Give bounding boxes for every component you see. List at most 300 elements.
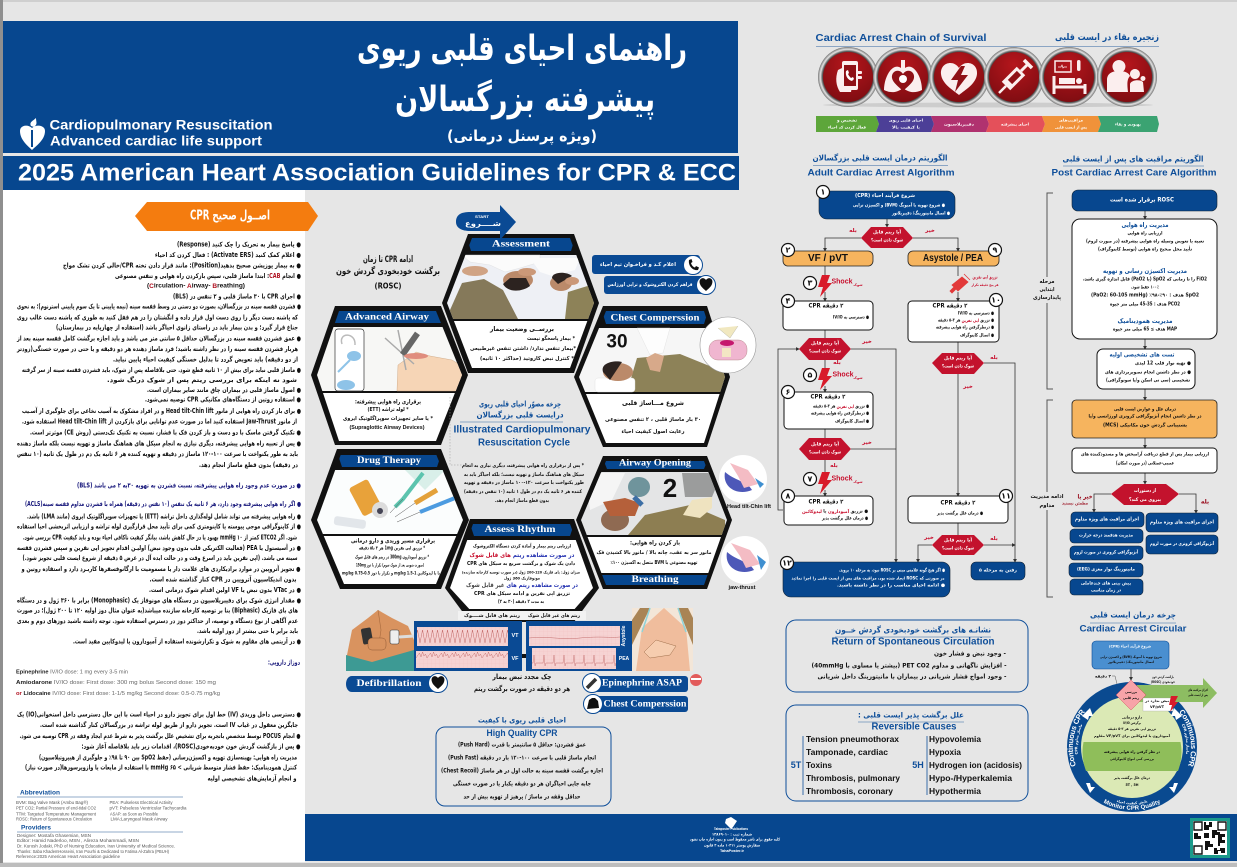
connectors: post arrest (1094, 211, 1196, 513)
panel: reversible causes: Reversible Causes (872, 722, 957, 732)
decision: shockable rhythm 3: آیا ریتم قابل (944, 354, 972, 362)
box: airway oxygen haemodynamics (1072, 219, 1217, 339)
decision: shockable rhythm 5: آیا ریتم قابل (944, 536, 972, 544)
icon: bed and monitor (1054, 60, 1085, 94)
heading: cardiac arrest circular: چرخه درمان ایست قلبی (1090, 610, 1176, 620)
icon: family (1107, 60, 1145, 92)
box 11: 2 minute CPR: ۱۱ (1001, 492, 1011, 500)
heading: post cardiac arrest algorithm: Post Cardiac Arrest Care Algorithm (1052, 168, 1216, 178)
callout: shock: نبض ندارد در (1144, 699, 1169, 703)
box: airway oxygen haemodynamics: مدیریت راه هوایی (1122, 221, 1168, 229)
chevrons: chain labels: بهبودی و بقاء (1115, 122, 1142, 126)
list: 5T: 5T (791, 760, 802, 770)
bracket label: ongoing management (1030, 492, 1064, 510)
rhythm text: مونوفازیک 360 ژول (504, 576, 541, 580)
abbreviation: ROSC: Return of Spontaneous Circulation (16, 816, 93, 822)
connector (522, 654, 526, 658)
panel: return of spontaneous circulation: - وجود نبض و فشار خون (934, 650, 1006, 658)
abbreviation: TTM: Targeted Temperature Management (16, 812, 97, 816)
list: 5H: 5H (912, 760, 924, 770)
text block: CPR principles: ● انجام CAB: ابتدا ماساژ قلبی، سپس بازکردن راه هوایی و تنفس مصنوعی (115, 272, 301, 280)
text block: advanced airway and shock: ● در VTac بدون نبض یا VF اولین اقدام شوک درمانی است. (149, 586, 301, 594)
boxes: no pathway: مدیریت هدفمند درجه حرارت (1079, 534, 1133, 538)
subtitle english: Cardiopulmonary Resuscitation (50, 118, 272, 132)
box 12: ROSC outcome: ● اگر هیچ گونه علامتی مبنی بر ROSC نبود، به مرحله ۱۰ بروید. (839, 566, 945, 574)
text block: advanced airway and shock: های بای فازیک (Biphasic) بنا بر توصیه کارخانه سازنده میباشد(به عنوان مثال دوز اولیه ۱۲۰ تا ۲۰۰ ژول)؛ در صورت (17, 607, 298, 615)
box 6: 2 minute CPR: ۲ دقیقه CPR (810, 394, 846, 400)
text block: CPR principles: از دو دقیقه) باید تعویض گردد تا بدلیل خستگی کیفیت احیاء پایین نیاید. (113, 356, 298, 364)
icon: syringe epinephrine: هر پنج دقیقه تکرار (971, 283, 999, 287)
box 10: 2 minute CPR: ● تزریق اپی نفرین هر ۳-۵ دقیقه (938, 318, 994, 324)
labels: no or unsure, yes: مطمئن نیستید (1062, 500, 1088, 506)
label: defibrillation: Defibrillation (356, 679, 422, 689)
decision: follows commands: از دستورات (1134, 488, 1156, 494)
label: chest compression (584, 694, 688, 714)
panel: return of spontaneous circulation: - افزایش ناگهانی و مداوم PET CO2 (بیشتر یا مساوی با 40mmHg) (812, 662, 1007, 670)
abbreviation: PET CO2: Partial Pressure of end-tidal CO2 (16, 806, 97, 810)
box 1: start CPR (816, 186, 955, 219)
ring (1067, 682, 1197, 812)
labels: yes and no 5: خیر (923, 535, 934, 541)
box 10: 2 minute CPR: ● درنظرگرفتن راه هوایی پیشرفته (936, 324, 994, 330)
label: head tilt chin lift: Head tilt-Chin lift (727, 504, 771, 510)
box: airway oxygen haemodynamics: تعبیه یا تعویض وسیله راه هوایی پیشرفته (در صورت لزوم) (1086, 238, 1204, 244)
text block: advanced airway and shock: بدون اندیکاسیون آتروپین در CPR کنار گذاشته شده است. (149, 574, 296, 583)
abbreviation: pVT: Pulseless Ventricular Tachycardia (110, 806, 187, 810)
labels: yes and no 3: خیر (962, 384, 973, 390)
label: defibrillation (346, 674, 448, 692)
icon: syringe epinephrine (950, 274, 999, 293)
advanced airway note: * پس از برقراری راه هوایی پیشرفته، دیگری نیازی به انجام (462, 462, 584, 469)
box 12: ROSC outcome: در صورتی که ROSC ایجاد شده بود، مراقبت های پس از ایست قلبی را اجرا نمائید (792, 576, 945, 580)
box: start CPR: شروع فرآیند احیاء (CPR) (1109, 644, 1151, 648)
panel: high quality CPR: انجام ماساژ قلبی با سرعت ۱۰۰-۱۲۰ بار در دقیقه (Push Fast) (448, 754, 596, 762)
heading: continue CPR until ROSC: ادامه CPR تا زمان (363, 255, 413, 265)
text block: access and ROSC: جایگزین معقول در غیاب IV است. تجویز دارو از طریق لوله تراشه در بزرگسالان کنار گذاشته شده است. (40, 721, 298, 729)
box 4: 2 minute CPR: ۴ (786, 296, 791, 306)
compression text (605, 399, 701, 435)
box: initial diagnostic tests: تست های تشخیصی اولیه (1110, 352, 1174, 358)
subtitle english (50, 118, 272, 148)
inner text: دارو درمانی (1122, 714, 1142, 720)
box 6: 2 minute CPR: ۶ (786, 388, 791, 396)
box 11: 2 minute CPR: ● درمان علل برگشت پذیر (936, 510, 983, 516)
label: epinephrine ASAP (582, 674, 688, 692)
text block: CPR principles (16, 240, 301, 469)
decision: shockable rhythm 4 (799, 438, 851, 460)
hexagon: assess rhythm (445, 519, 600, 622)
chevrons: chain labels: تشخیص و (836, 118, 858, 122)
panel: principles of CPR (3, 190, 318, 862)
icon: shock 7 (804, 472, 863, 494)
panel: return of spontaneous circulation: - وجود امواج فشار شریانی در بیماران با مانیتورینگ داخل شریانی (818, 672, 1007, 680)
providers (16, 824, 183, 859)
box: airway oxygen haemodynamics: مدیریت اکسیژن رسانی و تهویه (1103, 267, 1187, 275)
chain: advanced resuscitation (984, 47, 1044, 107)
box: initial diagnostic tests: ● تهیه نوار قلب 12 لیدی (1135, 360, 1191, 366)
labels: yes and no 3 (962, 355, 998, 390)
panel: high quality CPR: عمق فشردن: حداقل ۵ سانتیمتر با قدرت (Push Hard) (458, 742, 586, 748)
panel: reversible causes: علل برگشت پذیر ایست قلبی : (858, 710, 964, 720)
icon: warning stamp (690, 674, 702, 686)
arrow: start (456, 205, 516, 240)
text block: CPR principles: باید به طور یکنواخت با سرعت ۱۰۰-۱۲۰ ماساژ در دقیقه و تهویه کننده هر ۶ ثانیه یک دم در طول یک ثانیه (۱۰ تنفس (17, 450, 298, 458)
heading: continue CPR until ROSC (336, 255, 440, 290)
box: airway oxygen haemodynamics: ۱۰۰٪ حفظ شود. (1131, 284, 1159, 290)
text block: advanced airway and shock: ● در آریتمی های مقاوم به شوک و تکرارشونده استفاده از آمیودارون یا لیدوکایین مفید است. (73, 637, 301, 646)
box: asystole PEA: Asystole / PEA (923, 253, 983, 264)
text block: CPR principles: ● اصول ماساژ قلبی در بیماران چاق مانند سایر بیماران است. (147, 386, 301, 394)
text block: advanced airway and shock: ● در آسیستول یا PEA (فعالیت الکتریکی قلب بدون وجود نبض) اولیـن اقدام تجویز اپی نفرین و سپس فشردن قفسه (17, 543, 301, 552)
labels: no or unsure, yes: خیر یا (1078, 494, 1092, 500)
band label: Drug Therapy (357, 456, 421, 466)
decision: rhythm check: ریتم قلبی (1123, 696, 1139, 700)
bracket label: ongoing management: مداوم (1040, 503, 1054, 509)
list: 5H: Hydrogen ion (acidosis) (929, 760, 1022, 770)
box 8: 2 minute CPR: ۲ دقیقه CPR (808, 498, 844, 506)
inner text: 5T , 5H (1126, 783, 1138, 787)
text block: CPR principles: ● برای باز کردن راه هوایی از مانور Head tilt-Chin lift و در افراد مشکوک به آسیب نخاعی برای جلوگیری از آسـیب (22, 406, 301, 415)
drug text: برقراری مسیر وریدی و دارو درمانی (351, 538, 435, 544)
ring arrows (1082, 708, 1182, 793)
drug text: * تزریق اپی نفرین 1mg هر ۳ تا۵ دقیقه (359, 546, 425, 552)
boxes: yes pathway: آنژیوگرافی کرونری در صورت لزوم (1150, 540, 1214, 547)
decision: follows commands: پیروی می کند؟ (1129, 497, 1161, 503)
guidelines bar: 2025 American Heart Association Guidelines for CPR & ECC (18, 160, 736, 186)
icon: shock 7: شوک (853, 480, 863, 484)
assessment text: *بیمار تنفس ندارد/ داشتن تنفس غیرطبیعی (470, 346, 576, 352)
orange heading: اصــول صحیح CPR (190, 208, 270, 224)
list: 5T: Thrombosis, pulmonary (806, 773, 900, 783)
box 10: 2 minute CPR: ● اتصال کاپنوگراف (960, 332, 994, 338)
rhythm text: در صورت مشاهده ریتم های قابل شوک (470, 552, 575, 559)
list: 5H: Hypoxia (929, 747, 961, 757)
label: jaw thrust: jaw-thrust (727, 585, 756, 591)
boxes: no pathway: اجرای مراقبت های ویژه مداوم (1075, 516, 1139, 522)
icon: shock 5: Shock (832, 372, 854, 378)
box: start CPR (1092, 641, 1169, 669)
icon: jaw thrust (721, 536, 769, 584)
labels: yes and no (849, 228, 935, 234)
chart: shockable rhythms VT VF: VF (511, 656, 519, 662)
icon: shock 5: ۵ (808, 370, 813, 380)
icon: syringe (999, 60, 1032, 93)
assessment text: * بیمار پاسخگو نیست (527, 335, 575, 342)
ring labels: ماساژ مداوم CPR (1182, 724, 1190, 754)
decision: rhythm check: بررسی (1125, 690, 1138, 694)
ring labels: Continuous CPR (1180, 710, 1196, 766)
labels: yes and no 4 (830, 440, 872, 469)
rhythm text: در صورت مشاهده ریتم های غیر قابل شوک (466, 582, 578, 589)
title: پیشرفته بزرگسالان (395, 79, 655, 120)
publisher text (690, 827, 781, 853)
providers: Editor: Hamid Naderloo, MSN , Alireza Mohammadi, MSN (17, 838, 139, 843)
heading: chain of survival: زنجیره بقاء در ایست قلبی (1055, 33, 1159, 43)
chain: defibrillation (929, 47, 989, 107)
chart: shockable rhythms VT VF (414, 621, 522, 671)
inner text (1094, 714, 1171, 787)
box: treat causes and complications: درمان علل و عوارض ایست قلبی (1114, 406, 1176, 412)
box: start CPR: اتصال مانیتورینگ/ دفیبریلاتور (1107, 659, 1154, 665)
callout: electroshock and emergency therapy: فراهم کردن الکتروشوک و تراپی اورژانس (608, 281, 692, 288)
icon: head tilt chin lift (719, 455, 767, 503)
airway opening text: مانور سر به عقب، چانه بالا / مانور بالا کشیدن فک (596, 549, 712, 556)
box: asystole PEA: ۹ (993, 246, 998, 254)
list: 5T (791, 734, 900, 796)
box 6: 2 minute CPR: ● تزریق اپی نفرین هر ۳-۵ دقیقه (813, 404, 869, 410)
title: (ویژه پرسنل درمانی) (447, 127, 597, 146)
publisher text: TahaPoster.ir (720, 849, 745, 853)
text block: access and ROSC: و انجام آزمایش‌های تشخیصی اولیه (208, 773, 296, 782)
icon: syringe epinephrine: تزریق اپی نفرین (972, 276, 998, 280)
boxes: yes pathway: اجرای مراقبت های ویژه مداوم (1150, 520, 1214, 526)
decision: shockable rhythm 5: شوک دادن است؟ (942, 544, 974, 552)
decision: shockable rhythm 2: شوک دادن است؟ (809, 348, 841, 354)
decision: rhythm check (1116, 680, 1146, 710)
heading: continue CPR until ROSC: برگشت خودبخودی گردش خون (336, 265, 440, 277)
box 1: start CPR: ۱ (821, 188, 825, 196)
box: VF pVT: ۲ (786, 246, 791, 254)
list: 5H: Hypothermia (929, 786, 981, 796)
arrow: post cardiac arrest care (1137, 675, 1217, 708)
arrow: post cardiac arrest care: بازگشت گردش خون (1152, 675, 1174, 679)
hexagon: airway opening and breathing (576, 456, 733, 589)
airway opening text: تهویه مصنوعی با BVM متصل به اکسیژن ۱۰۰٪ (610, 560, 698, 566)
callout: activate code (592, 255, 702, 274)
box 12: ROSC outcome: ۱۲ (782, 558, 792, 568)
chevrons: chain labels: پس از ایست قلبی (1055, 124, 1088, 130)
subtitle english: Advanced cardiac life support (50, 134, 263, 148)
abbreviation: PEA: Pulseless Electrical Activity (110, 800, 173, 805)
icon: publisher logo (725, 817, 737, 829)
list: 5T: Tamponade, cardiac (806, 747, 888, 757)
chevrons: chain labels: فعال کردن کد احیاء (828, 124, 867, 130)
ring labels: Monitor CPR Quality (1104, 799, 1160, 810)
box: go to step 5: رفتن به مرحله ۵ (979, 568, 1017, 574)
list: 5H (912, 734, 1022, 796)
chevrons: chain labels (816, 116, 1159, 132)
arrow: post cardiac arrest care: خودبخودی (ROSC) (1151, 680, 1175, 684)
box 6: 2 minute CPR (782, 386, 873, 429)
text block: drug dosage: Epinephrine IV/IO dose: 1 mg every 3-5 min (16, 670, 128, 676)
text block: CPR principles: ● استفاده روتین از دستگاه‌های مکانیکی CPR توصیه نمی‌شود. (145, 396, 301, 404)
box 4: 2 minute CPR (782, 294, 873, 330)
text block: compression ratio: ● در صورت عدم وجود راه هوایی پیشرفته، نسبت فشردن به تهویه ۳۰به ۲ می باشد (BLS) (77, 482, 301, 490)
callout: electroshock and emergency therapy (604, 276, 716, 294)
list: 5T: Toxins (806, 760, 832, 770)
text block: compression ratio (25, 482, 301, 508)
publisher text: Tahaposter Publications (714, 827, 748, 831)
box: neurological assessment (1072, 448, 1217, 473)
box: neurological assessment: ارزیابی بیمار پس از قطع دریافت آرامبخش ها و مسدودکننده های (1081, 450, 1209, 458)
heading: post cardiac arrest algorithm: الگوریتم مراقبت های پس از ایست قلبی (1062, 154, 1204, 164)
decision: shockable rhythm 5 (932, 535, 984, 555)
header banner (3, 21, 738, 153)
inner text: در نظر گرفتن راه هوایی پیشرفته (1104, 749, 1160, 754)
list: 5T: Thrombosis, coronary (806, 786, 893, 796)
decision: shockable rhythm 2 (799, 338, 851, 360)
text block: CPR principles: (Circulation- Airway- Breathing) (147, 282, 245, 290)
labels: yes and no: بله (849, 228, 857, 234)
decision: shockable rhythm 4: آیا ریتم قابل (811, 440, 839, 448)
text block: CPR principles: شود نه اینکه برای بررسی ریتم پس از شوک درنگ شود. (107, 375, 297, 384)
connectors: adult algorithm (778, 219, 1015, 562)
icon: chest cross-section (700, 317, 756, 373)
label: 2 minutes: ۲ دقیقه (1095, 674, 1112, 678)
text block: drug dosage: Amiodarone IV/IO dose: First dose: 300 mg bolus Second dose: 150 mg (16, 680, 216, 686)
box: treat causes and complications (1072, 400, 1217, 438)
box: initial diagnostic tests: ● در نظر داشتن انجام تصویربرداری های (1105, 370, 1191, 376)
heading: chain of survival: Cardiac Arrest Chain of Survival (816, 32, 987, 44)
box: treat causes and complications: پشتیبانی گردش خون مکانیکی (MCS) (1103, 422, 1187, 428)
text block: CPR principles: ● اجرای CPR با ۳۰ ماساژ قلبی و ۲ تنفس در (BLS) (173, 292, 301, 300)
box 6: 2 minute CPR: ● اتصال کاپنوگراف (835, 418, 869, 424)
text block: advanced airway and shock: سینه می باشد. (اپی نفرین باید در اسرع وقت و در حالت ایده آل در عرض ۵ دقیقه از شروع ایست قلبی تجویز شود.) (22, 553, 297, 562)
panel: reversible causes (786, 705, 1028, 801)
text block: access and ROSC: ● انجام POCUS توسط متخصص باتجربه برای تشخیص علل برگشت پذیر به شرط عدم ایجاد وقفه در CPR توصیه می شود. (20, 732, 301, 740)
illustration: chest compression patient (632, 608, 693, 671)
heading: post cardiac arrest algorithm (1052, 154, 1216, 178)
chart: cardiac arrest circular (1067, 640, 1217, 812)
icon: shock 3: ۳ (808, 278, 813, 288)
arrow: post cardiac arrest care: پس از ایست قلبی (1188, 693, 1208, 697)
arrow: start: START (475, 215, 490, 219)
text block: CPR principles: که پاشنه دست دیگر را روی دست اول قرار داده و انگشتان را در هم قفل کنید به طوری که پاشنه دست غالب روی (17, 313, 298, 321)
callout: shock (1143, 696, 1178, 712)
bracket: initial stabilization: مرحله (1040, 279, 1054, 285)
chain: post arrest care (1039, 47, 1099, 107)
boxes: no pathway: در زمان مناسب (1091, 588, 1122, 594)
orange heading (135, 202, 318, 231)
assessment text (470, 325, 576, 362)
text block: advanced airway and shock: ● تجویز آتروپین در موارد برادیکاردی های علامت دار یا مسمومیت با ارگانوفسفرها کاربـرد دارد و استفاده روتین و (21, 564, 301, 573)
labels: yes and no 4: خیر (861, 440, 872, 446)
assessment text: * کنترل نبض کاروتید (حداکثر ۱۰ ثانیه) (480, 355, 574, 362)
abbreviation: LMA:Laryngeal Mask Airway (110, 816, 168, 822)
icon: shock 5: شوک (853, 376, 863, 380)
callout: activate code: اعلام کـد و فراخـوان تیم احیاء (600, 261, 676, 268)
box: airway oxygen haemodynamics: PCO2 هدف : 35-45 میلی متر جیوه (1110, 302, 1180, 308)
rhythm text (462, 542, 581, 605)
decision: follows commands (1111, 484, 1179, 505)
labels: yes and no 5: بله (990, 536, 998, 542)
band label: Assessment (492, 240, 551, 250)
box: neurological assessment: عصبی-عضلانی (در صورت امکان) (1116, 460, 1174, 466)
providers: Dr. Kurosh Jodaki, PhD of Nursing Education, Iran University of Medical Science. (17, 844, 175, 848)
decision: shockable rhythm 3: شوک دادن است؟ (942, 362, 974, 370)
chart: shockable rhythms VT VF: VT (511, 633, 519, 639)
advanced airway note: کننده هر ۶ ثانیه یک دم در طول ۱ ثانیه (۱۰ تنفس در دقیقه) (464, 489, 582, 495)
text block: CPR principles: ● اعلام کمک کنید (Activate ERS) : فعال کردن کد احیاء (155, 251, 301, 259)
box 11: 2 minute CPR (908, 490, 1012, 523)
inner text: درمان علل برگشت پذیر (1113, 775, 1150, 780)
abbreviation: Abbreviation (20, 790, 60, 796)
box 10: 2 minute CPR (908, 294, 1002, 342)
title (357, 29, 687, 146)
text block: drug dosage: دوزاژ دارویی: (268, 659, 300, 667)
rhythm text: تزریق اپی نفرین و ادامه سیکل های CPR (474, 591, 570, 597)
box 12: ROSC outcome (780, 556, 950, 597)
heading: cardiac arrest circular: Cardiac Arrest Circular (1080, 624, 1187, 634)
labels: yes and no 3: بله (990, 355, 998, 361)
heading: adult cardiac arrest algorithm (808, 152, 954, 178)
center title: Illustrated Cardiopulmonary (454, 424, 591, 436)
box 12: ROSC outcome: ● ادامه احیای مناسب را در نظر داشته باشید. (837, 584, 945, 588)
box 8: 2 minute CPR: ● درمان علل برگشت پذیر (821, 514, 868, 522)
box 8: 2 minute CPR: ● تزریق آمیودارون یا لیدوکائین (802, 508, 868, 514)
recheck pulse text: چک مجدد نبض بیمار (492, 673, 552, 681)
bracket: initial stabilization: ابتدایی (1040, 287, 1055, 293)
box: initial diagnostic tests: تشخیصی (سی تی اسکن و/یا سونوگرافی) (1106, 376, 1190, 384)
decision: shockable rhythm 2: آیا ریتم قابل (811, 340, 839, 346)
compression text: شروع مـــاساژ قلبی (622, 399, 684, 407)
box: go to step 5 (971, 562, 1025, 580)
icon: shock 3: شوک (853, 283, 863, 287)
text block: advanced airway and shock: عدم آگاهی از نوع دستگاه و توصیه، از حداکثر دوز در دسترس استفاده شود. توجه داشته باشید دوزهای دوم و بعدی (17, 616, 298, 625)
text block: access and ROSC: مدیریت راه هوایی: بهینه‌سازی تهویه و اکسیژن‌رسانی (حفظ SpO2 بین ۹۰ تا ۹۸٪ و جلوگیری از هیپروتیلاسیون) (39, 753, 297, 761)
abbreviation: BVM: Bag Valve Mask (Ambu Bag®) (16, 800, 89, 805)
band label: Advanced Airway (345, 312, 430, 322)
decision: shockable rhythm: شوک دادن است؟ (871, 236, 903, 244)
center title: درایست قلبی بزرگسالان (476, 410, 564, 420)
text block: access and ROSC: ● دسترسی داخل وریدی (IV) خط اول برای تجویز دارو در احیاء است با این حال دسترسی داخل استخوانی(IO) یک (17, 710, 301, 718)
airway text: برقراری راه هوایی پیشرفته: (355, 398, 421, 406)
box: ROSC established: ROSC برقرار شده است (1110, 196, 1175, 204)
text block: drug dosage (16, 659, 300, 697)
chain: CPR (873, 47, 933, 107)
text block: CPR principles: ● پاسخ بیمار به تحریک را چک کنید (Response) (177, 240, 301, 248)
text block: compression ratio: ● اگر راه هوایی پیشرفته وجود دارد، هر ۶ ثانیه یک تنفس (۱۰ نفس در دقیقه) همراه با فشردن مداوم قفسه سینه(ACLS) (25, 500, 301, 508)
box: VF pVT: VF / pVT (808, 253, 848, 264)
box 6: 2 minute CPR: ● درنظرگرفتن راه هوایی پیشرفته (811, 410, 869, 416)
airway text (343, 398, 433, 431)
labels: no or unsure, yes (1062, 494, 1209, 506)
text block: CPR principles: جناغ قرار گیرد؛ و بدن بیمار باید در راستای زانوی احیاگر باشد (استفاده از چهارپایه در بیمارستان) (56, 324, 298, 332)
ring labels: پایش کیفیت احیاء (1116, 800, 1148, 805)
bracket label: ongoing management: ادامه مدیریت (1030, 494, 1064, 500)
number 2: 2 (663, 473, 677, 503)
compression text: رعایت اصول کیفیت احیاء (622, 428, 684, 435)
text block: access and ROSC (17, 710, 301, 782)
panel: high quality CPR: احیای قلبی ریوی با کیفیت (478, 716, 566, 724)
text block: CPR principles: از مانور Jaw-Thrust استفاده کنید اما در صورت عدم توانایی برای بازکردن از Head tilt-Chin lift استفاده شود. (22, 418, 297, 426)
boxes: yes pathway (1146, 513, 1218, 554)
illustration: defibrillation patient (346, 610, 414, 671)
box 10: 2 minute CPR: ۲ دقیقه CPR (932, 302, 968, 310)
center title: Resuscitation Cycle (478, 438, 570, 448)
list: 5T: Tension pneumothorax (806, 734, 899, 744)
shockable rhythm labels: ریتم های غیر قابل شوک (528, 612, 580, 619)
icon: shock 5 (804, 368, 863, 390)
abbreviation: ASAP: as Soon as Possible (110, 812, 159, 816)
panel: high quality CPR: جابه جایی احیاگران هر دو دقیقه یکبار یا در صورت خستگی (453, 780, 591, 788)
ring labels: ماساژ مداوم CPR (1074, 724, 1082, 754)
box 1: start CPR: ● شروع تهویه با آمبوبگ (BVM) و اکسیژن تراپی (853, 202, 945, 208)
chevrons: chain labels: مراقبت‌های (1059, 118, 1084, 122)
heading: chain of survival (816, 32, 1159, 46)
text block: CPR principles: ● عمق فشردن قفسه سینه در بزرگسالان حداقل ۵ سانتی متر می باشد و باید اجازه برگشت کامل قفسه سینه بعد از (16, 334, 301, 342)
shockable rhythm labels: ریتم های قابل شــــوک (464, 612, 520, 619)
publisher text: کلیه حقوق برای ناشر محفوظ است و بدون اجازه چاپ نشود (690, 836, 781, 842)
drug text (342, 538, 440, 576)
callout: shock: VF/pVT (1150, 705, 1165, 709)
publisher text: شماره ثبت : ۱۳۸۶۹۰۱۰ (712, 832, 752, 836)
labels: no or unsure, yes: بله (1201, 498, 1209, 506)
decision: shockable rhythm 3 (932, 353, 984, 374)
panel: high quality CPR: اجازه برگشت قفسه سینه به حالت اول در هر ماساژ (Chest Recoil) (441, 766, 603, 774)
band label: Breathing (632, 575, 679, 585)
text block: CPR principles: هربار فشردن قفسه سینه را در نظر داشته باشید؛ فرد ماساژ دهنده هر دو دقیقه و یا حتی در صورت خستگی(زودتر (16, 345, 298, 353)
